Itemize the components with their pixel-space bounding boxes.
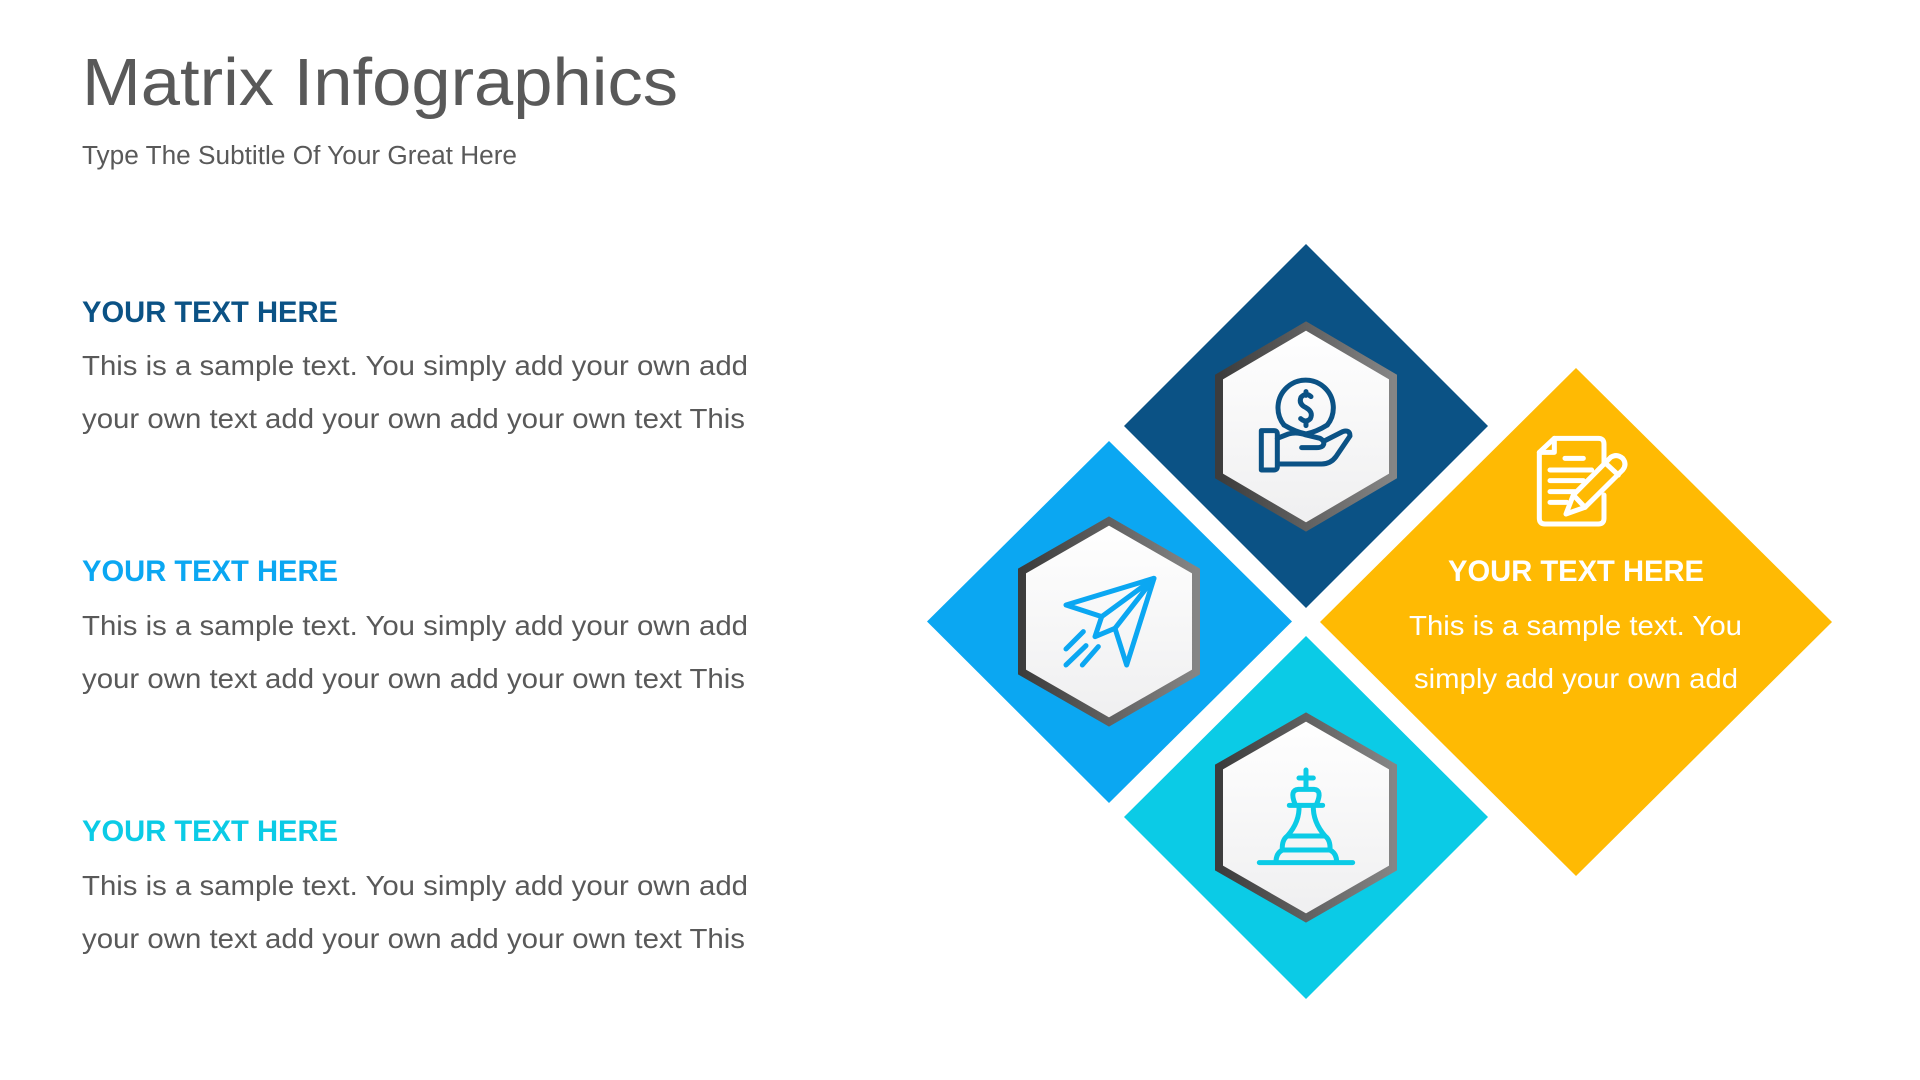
title: Matrix Infographics xyxy=(82,45,678,120)
body 3 xyxy=(82,870,748,954)
body 1 xyxy=(82,350,748,434)
icon: hand holding coin xyxy=(1261,380,1350,470)
subtitle: Type The Subtitle Of Your Great Here xyxy=(82,142,517,170)
text block 2 xyxy=(82,555,748,694)
panel: cyan diamond xyxy=(1124,636,1488,999)
body 2: your own text add your own add your own text This xyxy=(82,663,745,694)
icon: chess king xyxy=(1259,770,1353,863)
icon: document with pencil xyxy=(1539,438,1625,524)
body 2 xyxy=(82,610,748,694)
text block 1 xyxy=(82,296,748,434)
panel: dark blue diamond xyxy=(1124,244,1488,608)
panel: blue diamond xyxy=(927,441,1292,803)
body: simply add your own add xyxy=(1414,663,1738,694)
body: This is a sample text. You xyxy=(1409,610,1742,641)
heading 1: YOUR TEXT HERE xyxy=(82,296,338,329)
icon: paper plane xyxy=(1066,578,1154,665)
body xyxy=(1409,610,1742,694)
body 2: This is a sample text. You simply add your own add xyxy=(82,610,748,641)
hexagon: money xyxy=(1219,326,1393,527)
heading 2: YOUR TEXT HERE xyxy=(82,555,338,588)
heading 3: YOUR TEXT HERE xyxy=(82,815,338,848)
hexagon: chess king xyxy=(1219,717,1393,918)
heading: YOUR TEXT HERE xyxy=(1448,555,1704,588)
body 3: your own text add your own add your own text This xyxy=(82,923,745,954)
text block 3 xyxy=(82,815,748,954)
hexagon: paper plane xyxy=(1022,521,1196,722)
body 3: This is a sample text. You simply add your own add xyxy=(82,870,748,901)
body 1: This is a sample text. You simply add your own add xyxy=(82,350,748,381)
body 1: your own text add your own add your own text This xyxy=(82,403,745,434)
panel: yellow diamond xyxy=(1320,368,1832,876)
